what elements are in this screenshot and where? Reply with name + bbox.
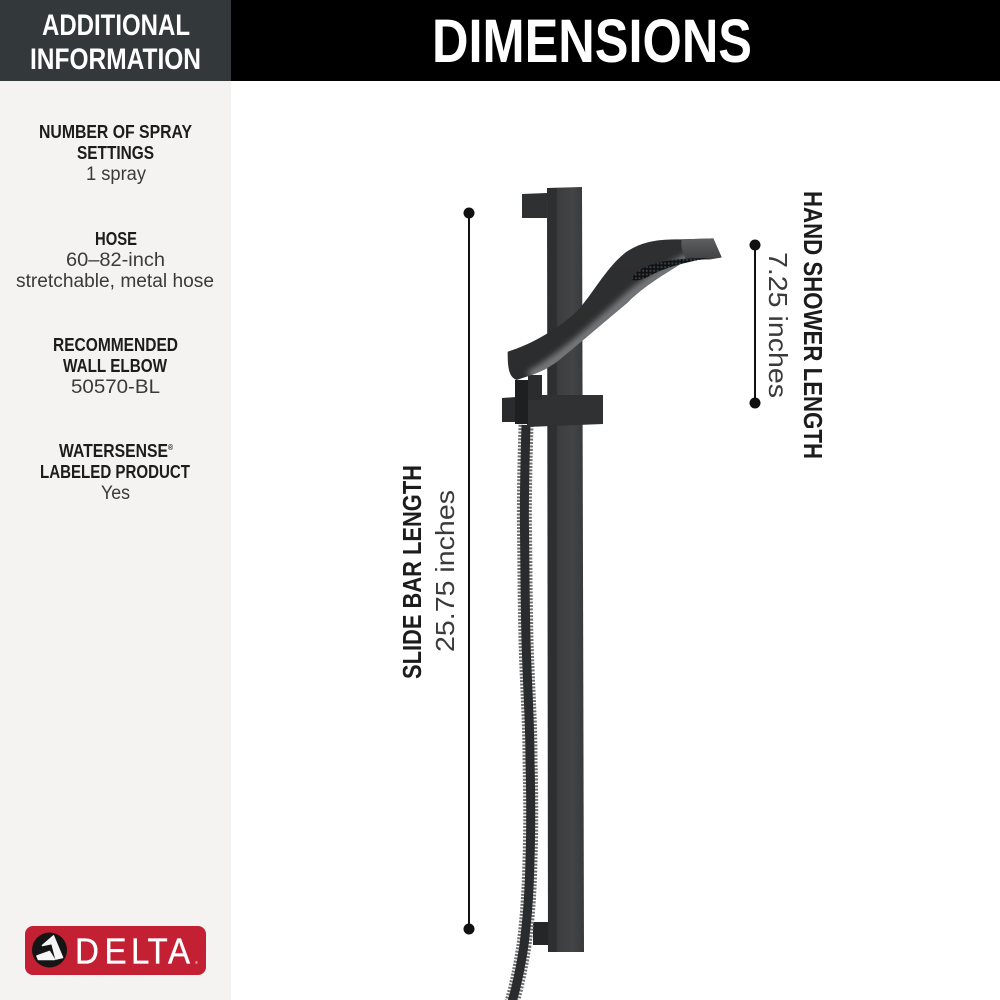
text block: watersense labeled product bbox=[40, 440, 191, 504]
label: hand shower length bbox=[763, 191, 828, 459]
hand shower bbox=[508, 238, 722, 380]
dimension line: hand shower length bbox=[750, 240, 760, 408]
product: hand shower on slide bar bbox=[502, 187, 722, 1000]
logo: delta: DELTA bbox=[75, 932, 190, 972]
heading: additional information: ADDITIONAL bbox=[42, 9, 190, 42]
logo: delta bbox=[25, 926, 206, 975]
heading: additional information bbox=[0, 0, 231, 81]
text block: number of spray settings: SETTINGS bbox=[77, 142, 154, 163]
bottom bracket bbox=[533, 922, 549, 945]
dimension line: slide bar length bbox=[464, 208, 474, 934]
text block: recommended wall elbow: WALL ELBOW bbox=[63, 355, 167, 376]
text block: recommended wall elbow: 50570-BL bbox=[71, 377, 160, 398]
text block: watersense labeled product: LABELED PRODUCT bbox=[40, 461, 191, 482]
label: slide bar length: SLIDE BAR LENGTH bbox=[397, 465, 427, 679]
text block: hose: stretchable, metal hose bbox=[16, 271, 214, 292]
top bracket bbox=[522, 193, 547, 218]
label: slide bar length: 25.75 inches bbox=[430, 490, 460, 652]
panel: additional information sidebar bbox=[0, 0, 231, 1000]
slider clamp and connector bbox=[502, 375, 603, 427]
text block: number of spray settings bbox=[39, 121, 193, 185]
text block: watersense labeled product: Yes bbox=[101, 483, 130, 504]
logo: delta: ® bbox=[195, 960, 198, 965]
label: hand shower length: 7.25 inches bbox=[763, 252, 793, 398]
text block: recommended wall elbow bbox=[53, 334, 178, 398]
text block: watersense labeled product: ® bbox=[168, 443, 173, 452]
text block: watersense labeled product: WATERSENSE bbox=[59, 440, 187, 461]
hose bbox=[512, 425, 531, 1000]
text block: number of spray settings: NUMBER OF SPRAY bbox=[39, 121, 193, 142]
text block: recommended wall elbow: RECOMMENDED bbox=[53, 334, 178, 355]
text block: number of spray settings: 1 spray bbox=[86, 164, 146, 185]
slide bar bbox=[547, 187, 584, 952]
heading: dimensions: DIMENSIONS bbox=[432, 7, 752, 75]
text block: hose: HOSE bbox=[95, 228, 137, 249]
label: hand shower length: HAND SHOWER LENGTH bbox=[798, 191, 828, 459]
label: slide bar length bbox=[397, 465, 460, 679]
heading: additional information: INFORMATION bbox=[30, 43, 201, 76]
icon: delta trefoil bbox=[32, 932, 67, 968]
text block: hose bbox=[16, 228, 214, 292]
text block: hose: 60–82-inch bbox=[66, 250, 165, 271]
heading: dimensions bbox=[231, 0, 1000, 81]
